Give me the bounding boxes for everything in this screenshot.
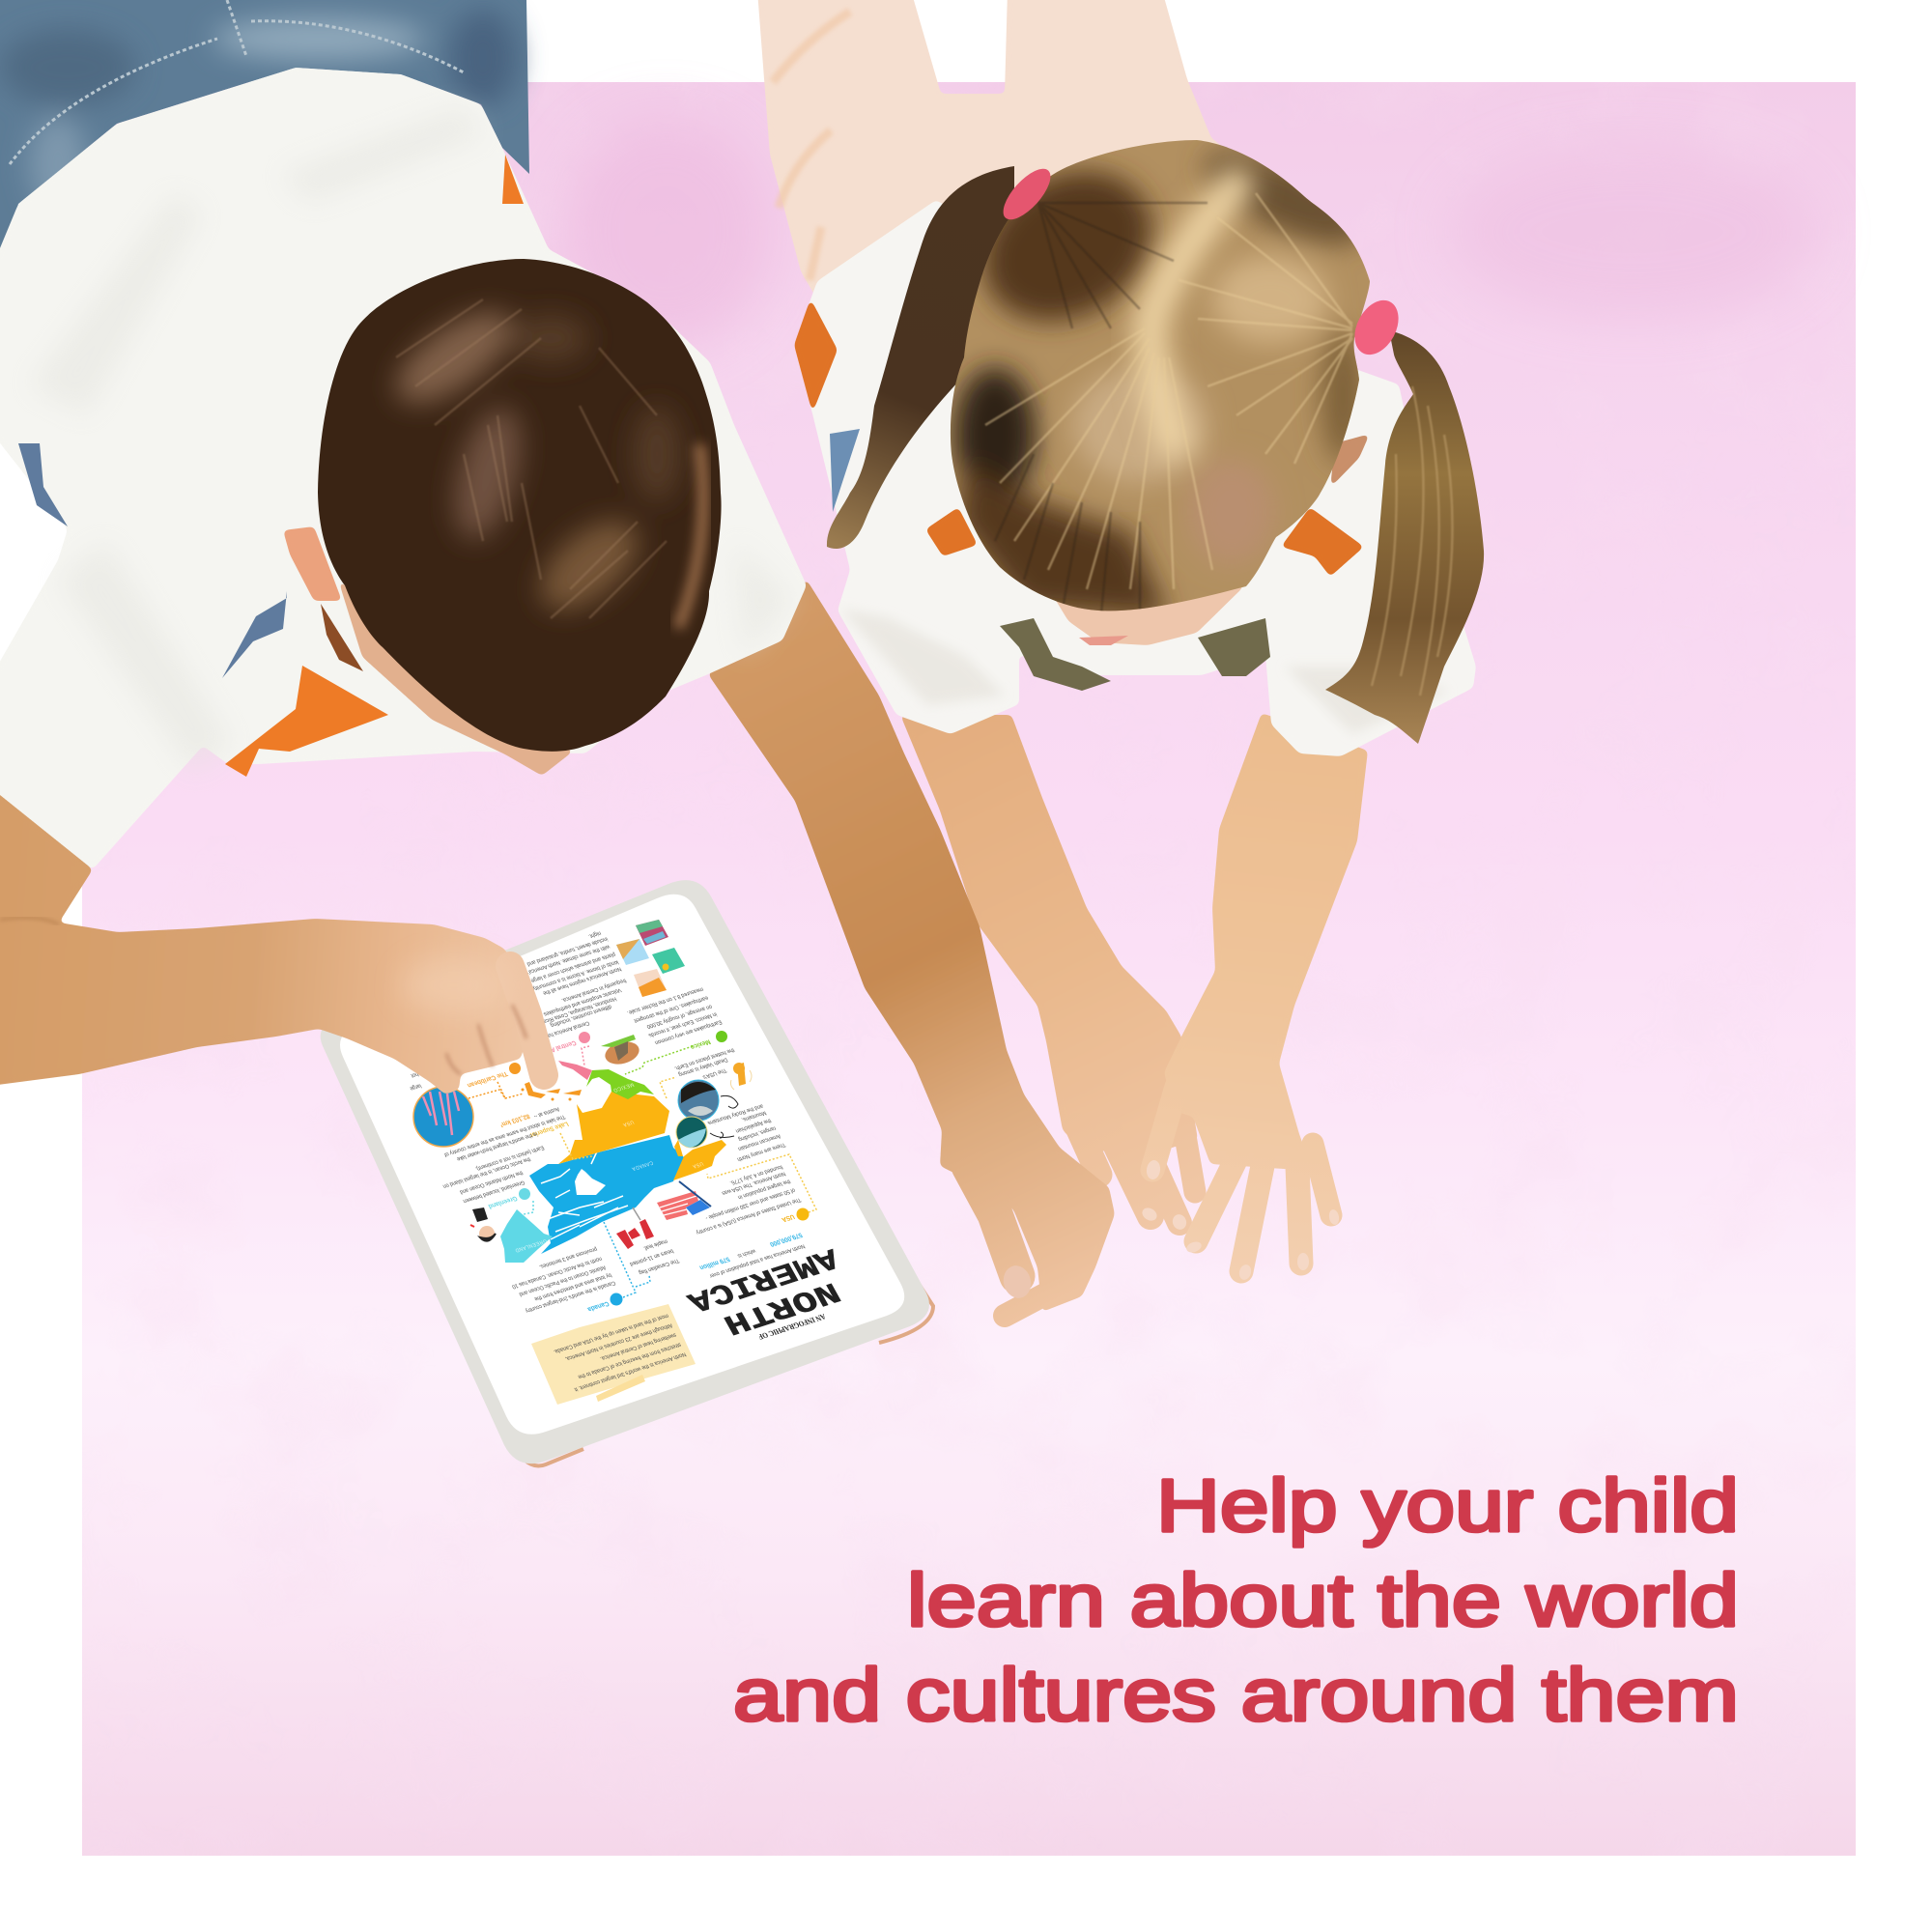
section: Canada: The Canadian flag <box>638 1257 680 1275</box>
section: Mexico: on average, of roughly 30,000 <box>645 1003 713 1029</box>
section: Canada: provinces and 3 territories. <box>537 1245 598 1269</box>
map labels: USA <box>691 1160 704 1169</box>
section: Mexico <box>625 985 727 1074</box>
section: Central America text: with the same climate. North America's <box>524 943 611 976</box>
boy t-shirt <box>0 68 807 869</box>
section: USA: the largest population in <box>736 1178 791 1200</box>
girl t-shirt <box>794 200 1476 756</box>
map labels: CANADA <box>630 1159 654 1172</box>
map of North America <box>500 1061 726 1263</box>
section: The Caribbean: large <box>409 1082 422 1092</box>
section: The Caribbean: The Caribbean <box>466 1069 509 1089</box>
girl finger nails <box>1140 1159 1340 1281</box>
girl hair <box>951 140 1370 611</box>
girl figure <box>757 0 1484 1281</box>
shirt olive print <box>1000 618 1270 691</box>
section: Mexico: in Mexico. Each year, it records <box>647 1010 718 1037</box>
thumb nail <box>1000 1263 1035 1301</box>
icon: thermometer <box>730 1063 752 1090</box>
note: intro on yellow paper: stretches from the freezing ice of Canada to the <box>577 1341 682 1379</box>
right pigtail strands <box>1372 386 1453 696</box>
section: Canada: maple leaf. <box>641 1237 668 1251</box>
girl left arm <box>900 715 1198 1154</box>
tablet bezel <box>321 880 929 1463</box>
map: Greenland <box>500 1209 553 1263</box>
section: Greenland: the Arctic Ocean, is the largest island on <box>441 1155 531 1189</box>
section: USA: USA <box>780 1212 796 1223</box>
section: mountains text: Mountains, <box>740 1109 767 1122</box>
section: Greenland: Earth (which is not a continent). <box>473 1144 545 1172</box>
section: Central America text: different countries, including <box>549 1003 612 1028</box>
section: Central America text: Central America <box>530 1038 578 1059</box>
section: Death Valley text <box>660 1046 735 1098</box>
map: Arctic channels <box>541 1150 628 1239</box>
section: The Caribbean <box>409 1063 524 1098</box>
population text: 579 million <box>698 1255 731 1271</box>
girl legs and torso <box>757 0 1246 299</box>
infographic title: NORTH <box>717 1275 846 1341</box>
photo: mountain and earth circles <box>676 1080 738 1148</box>
section: Central America text: North America's regions have all the <box>541 965 622 996</box>
girl left scrunchie <box>996 161 1058 227</box>
section: Greenland: Greenland <box>487 1194 519 1209</box>
section: Lake Superior: 82,103 km² <box>497 1112 531 1128</box>
headline: Help your child <box>1156 1464 1739 1548</box>
section: mountains text <box>706 1102 786 1162</box>
icon: person in hat <box>470 1208 496 1241</box>
map labels <box>513 1081 704 1253</box>
boy ear <box>283 526 342 601</box>
map: Canada <box>529 1135 684 1254</box>
section: Canada: Atlantic Ocean to the Pacific Ocean and <box>518 1264 607 1297</box>
note: intro on yellow paper: Although there are 23 countries in North America, <box>563 1321 673 1362</box>
section: Mexico: measured 8.1 on the Richter scale. <box>625 985 704 1015</box>
section: Canada: by total area and stretches from the <box>533 1271 612 1301</box>
tablet <box>321 880 933 1466</box>
boy left arm and hand <box>0 787 541 1094</box>
section: Mexico: Mexico <box>689 1037 712 1050</box>
section: mountains text: American mountain <box>737 1132 781 1151</box>
section: Death Valley text: The USA's <box>701 1066 727 1080</box>
girl right hand fingers <box>1152 1087 1331 1271</box>
section: mountains text: There are many North <box>736 1141 786 1162</box>
boy figure <box>0 0 1115 1316</box>
tablet screen <box>340 895 904 1435</box>
note: intro on yellow paper: North America is the world's 3rd largest continent. It <box>573 1350 687 1392</box>
shirt shadow folds <box>840 609 1449 734</box>
hand highlight <box>401 956 507 1014</box>
shirt blue patch <box>830 429 860 512</box>
section: Lake Superior: Austria at -- <box>532 1105 560 1119</box>
boy face <box>338 580 573 776</box>
section: The Caribbean: hot <box>410 1070 419 1078</box>
girl ear <box>1330 434 1370 488</box>
section: USA: of 50 states and over 330 million people - <box>704 1186 796 1221</box>
section: Central America text: frequently in Central America. <box>560 977 627 1003</box>
section: Canada: north to the Arctic Ocean. Canada has 10 <box>511 1255 603 1290</box>
section: Greenland <box>441 1144 545 1214</box>
boy pointing finger <box>510 966 544 1075</box>
map labels: MEXICO <box>611 1081 635 1093</box>
section: Canada: Canada is the world's 2nd-largest country <box>524 1279 616 1314</box>
leg highlights <box>773 12 850 280</box>
section: Death Valley text: the hottest places on Earth. <box>672 1046 735 1071</box>
section: Mexico: Earthquakes are very common <box>653 1018 723 1045</box>
headline <box>733 1464 1739 1737</box>
jeans seams <box>10 0 464 164</box>
shirt folds <box>29 106 792 773</box>
icon: Mexico landscape <box>601 1035 641 1067</box>
section: Central America text: night. <box>586 929 602 939</box>
section: Central America text: Volcanic eruptions and earthquakes <box>542 986 622 1017</box>
photo: coral sea circle <box>413 1087 473 1147</box>
section: Central America text: include desert, tundra, grassland and <box>526 935 609 967</box>
girl left hand fingers <box>1077 1125 1195 1223</box>
tablet rose-gold edge <box>510 1270 933 1466</box>
section: Canada: Canada <box>586 1299 611 1313</box>
map: USA <box>558 1092 669 1164</box>
boy index finger <box>1005 1280 1072 1316</box>
headline: and cultures around them <box>733 1654 1739 1737</box>
section: USA: North America. The USA was <box>721 1170 786 1196</box>
girl face <box>1049 584 1246 645</box>
map labels: GREENLAND <box>513 1237 548 1253</box>
boy thumb <box>969 1166 1017 1276</box>
boy right arm and fist <box>708 580 1115 1312</box>
arm elbow crease <box>0 918 59 924</box>
section: Central America text: Central America has 7 <box>539 1019 590 1040</box>
boy hair <box>309 251 734 763</box>
girl right arm and palm <box>1164 713 1368 1171</box>
girl mouth <box>1079 636 1128 645</box>
population text: 579,000,000 <box>768 1231 804 1247</box>
map: Alaska <box>673 1140 726 1180</box>
infographic title: AN INFOGRAPHIC OF <box>756 1312 828 1342</box>
flag: Canada <box>616 1208 654 1249</box>
section: Canada: bears an 11-pointed <box>629 1247 674 1266</box>
biome pictures <box>616 920 685 997</box>
section: Canada <box>511 1222 680 1314</box>
section: Lake Superior: The lake is about the same area as the entire country of <box>442 1113 566 1157</box>
section: Central America text <box>524 929 627 1065</box>
map labels: USA <box>621 1119 635 1127</box>
section: Lake Superior <box>442 1105 592 1162</box>
section: Central America text: Honduras, Nicaragua, Costa Rica and <box>532 995 617 1027</box>
map: Central America <box>558 1061 592 1080</box>
section: mountains text: the Appalachian <box>734 1117 772 1133</box>
map: Caribbean islands <box>522 1082 582 1101</box>
population text: North America has a total population of over <box>708 1242 806 1278</box>
section: USA <box>695 1154 816 1236</box>
boy jeans <box>0 0 529 271</box>
map: Mexico <box>586 1069 654 1099</box>
note: intro on yellow paper <box>531 1304 696 1405</box>
section: Death Valley text: Death Valley is among <box>677 1056 728 1077</box>
headline: learn about the world <box>907 1559 1739 1642</box>
girl right scrunchie <box>1346 293 1407 362</box>
note: intro on yellow paper: most of the land is taken up by the USA and Canada. <box>552 1312 669 1354</box>
map: Hudson Bay <box>575 1169 606 1195</box>
section: Central America text: plants and animals which cover a large <box>529 951 616 983</box>
boy collar and neck <box>321 604 363 671</box>
shirt blue print <box>18 443 287 678</box>
girl left pigtail <box>827 166 1014 549</box>
population text <box>698 1231 806 1278</box>
section: Greenland: the North Atlantic Ocean and <box>459 1169 524 1195</box>
flag: USA <box>657 1181 711 1220</box>
section: Mexico: earthquakes. One of the strongest <box>632 994 709 1024</box>
note: intro on yellow paper: sweltering heat of Central America. <box>598 1331 677 1361</box>
section: Central America text: kinds of biome. A biome is a community <box>531 958 619 991</box>
shirt orange print <box>225 155 524 777</box>
jeans wash <box>0 10 517 213</box>
section: mountains text: and the Rocky Mountains <box>706 1102 764 1125</box>
section: USA: founded on 4 July 1776. <box>728 1163 783 1185</box>
section: Greenland: Greenland, located between <box>462 1179 526 1204</box>
section: mountains text: ranges, including <box>737 1124 777 1142</box>
shirt orange patches <box>794 298 1364 577</box>
infographic title <box>680 1241 846 1342</box>
population text: which is <box>736 1247 757 1259</box>
finger creases <box>446 1005 526 1074</box>
section: USA: The United States of America (USA) is a country <box>695 1196 802 1236</box>
section: Lake Superior: Lake Superior <box>527 1120 570 1139</box>
girl right pigtail <box>1325 330 1484 744</box>
section: Lake Superior: is the world's largest fresh-water lake <box>455 1130 538 1162</box>
infographic title: AMERICA <box>680 1241 845 1319</box>
